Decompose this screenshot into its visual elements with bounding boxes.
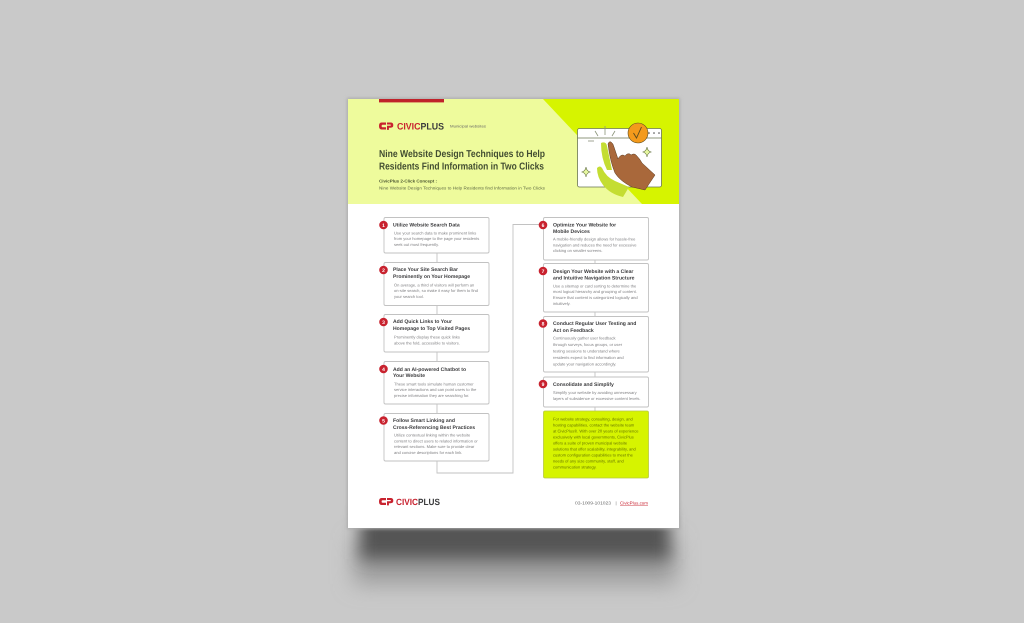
step 5 xyxy=(379,414,489,461)
step 8: Continuously gather user feedback xyxy=(553,336,617,340)
step 1: 1 xyxy=(382,223,385,229)
step 5: Follow Smart Linking and xyxy=(393,418,455,424)
step 2: Prominently on Your Homepage xyxy=(393,274,470,280)
subtitle: Nine Website Design Techniques to Help Residents find Information in Two Clicks xyxy=(379,185,545,190)
step 3: Prominently display these quick links xyxy=(394,334,460,339)
callout: needs of any size community, staff, and xyxy=(553,458,624,463)
step 3: Add Quick Links to Your xyxy=(393,319,452,325)
step 7: Ensure that content is categorized logically and xyxy=(553,295,638,300)
logo xyxy=(379,121,486,132)
callout: For website strategy, consulting, design, and xyxy=(553,416,633,421)
callout: at CivicPlus®. With over 20 years of experience xyxy=(553,428,639,433)
step 8: Conduct Regular User Testing and xyxy=(553,321,636,327)
step 7: intuitively. xyxy=(553,301,571,306)
callout: communication strategy. xyxy=(553,464,597,469)
step 2 xyxy=(379,262,489,306)
document page xyxy=(348,99,679,528)
page shadow xyxy=(347,98,680,584)
step 9: Simplify your website by avoiding unnecessary xyxy=(553,390,638,395)
logo: CIVICPLUS xyxy=(397,121,444,132)
title: Nine Website Design Techniques to Help xyxy=(379,149,545,160)
step 7: Design Your Website with a Clear xyxy=(553,269,633,275)
step 4: Add an AI-powered Chatbot to xyxy=(393,367,466,373)
step 9: Consolidate and Simplify xyxy=(553,382,614,388)
footer reference and link: CivicPlus.com xyxy=(620,500,648,506)
step 9 xyxy=(539,377,648,407)
step 2: your search tool. xyxy=(394,294,424,299)
step 8 xyxy=(539,316,648,372)
step 5: content to direct users to related information or xyxy=(394,438,478,443)
step 7 xyxy=(539,264,648,312)
step 8: testing sessions to understand where xyxy=(553,348,621,354)
callout: solutions that offer scalability, integrability, and xyxy=(553,446,636,451)
step 2: on-site search, so make it easy for them to find xyxy=(394,288,478,293)
callout: offers a suite of proven municipal website xyxy=(553,440,628,445)
flow connector lines xyxy=(437,224,595,473)
header band xyxy=(348,99,679,204)
step 4: 4 xyxy=(382,367,385,373)
step 4 xyxy=(379,362,489,404)
step 1: seek out most frequently. xyxy=(394,242,439,247)
subtitle xyxy=(379,179,545,190)
step 8: 8 xyxy=(542,321,545,327)
step 9: 9 xyxy=(542,382,545,388)
step 2: Place Your Site Search Bar xyxy=(393,267,458,273)
footer reference and link: 03-1009-101023 xyxy=(575,500,612,506)
step 6: navigation and reduces the need for excessive xyxy=(553,242,637,247)
step 6 xyxy=(539,218,648,260)
step 1: Use your search data to make prominent links xyxy=(394,230,476,235)
step 8: residents expect to find information and xyxy=(553,355,624,360)
step 8: Act on Feedback xyxy=(553,328,594,334)
callout: hosting capabilities, contact the website team xyxy=(553,422,635,427)
step 6: clicking on smaller screens. xyxy=(553,248,602,253)
step 9: layers of subsidence or excessive content levels. xyxy=(553,396,641,401)
step 7: Use a sitemap or card sorting to determine the xyxy=(553,283,637,288)
step 5: 5 xyxy=(382,418,385,424)
step 2: 2 xyxy=(382,268,385,274)
footer reference and link xyxy=(575,500,648,506)
footer logo xyxy=(379,497,440,507)
step 8: through surveys, focus groups, or user xyxy=(553,342,623,347)
step 6: Optimize Your Website for xyxy=(553,222,616,228)
title xyxy=(379,149,545,172)
step 7: 7 xyxy=(542,269,545,275)
step 4: service interactions and can point users to the xyxy=(394,387,477,392)
step 4: These smart tools simulate human customer xyxy=(394,381,474,386)
callout xyxy=(544,411,648,478)
step 7: most logical hierarchy and grouping of content. xyxy=(553,289,637,294)
callout: exclusively with local governments, CivicPlus xyxy=(553,434,634,439)
step 1 xyxy=(379,218,489,253)
step 6: 6 xyxy=(542,223,545,229)
step 5: Utilize contextual linking within the website xyxy=(394,433,471,438)
step 1: Utilize Website Search Data xyxy=(393,222,460,228)
step 4: Your Website xyxy=(393,373,425,379)
step 3 xyxy=(379,314,489,352)
step 4: precise information they are searching for. xyxy=(394,393,469,398)
step 1: from your homepage to the page your residents xyxy=(394,236,479,241)
step 3: 3 xyxy=(382,320,385,326)
subtitle: CivicPlus 2-Click Concept : xyxy=(379,179,437,184)
step 3: Homepage to Top Visited Pages xyxy=(393,326,470,332)
callout: custom configuration capabilities to meet the xyxy=(553,452,634,457)
step 2: On average, a third of visitors will perform an xyxy=(394,282,474,287)
step 7: and Intuitive Navigation Structure xyxy=(553,276,635,282)
footer reference and link: | xyxy=(616,500,617,506)
illustration: browser window with hand xyxy=(578,123,662,197)
step 5: relevant sections. Make sure to provide clear xyxy=(394,444,475,449)
footer logo: CIVICPLUS xyxy=(396,497,440,507)
step 6: A mobile-friendly design allows for hassle-free xyxy=(553,236,636,242)
step 5: Cross-Referencing Best Practices xyxy=(393,425,475,431)
title: Residents Find Information in Two Clicks xyxy=(379,162,544,172)
step 6: Mobile Devices xyxy=(553,229,590,235)
logo: Municipal websites xyxy=(450,124,486,128)
step 3: above the fold, accessible to visitors. xyxy=(394,340,460,345)
step 5: and concise descriptions for each link. xyxy=(394,450,462,455)
step 8: update your navigation accordingly. xyxy=(553,362,617,366)
